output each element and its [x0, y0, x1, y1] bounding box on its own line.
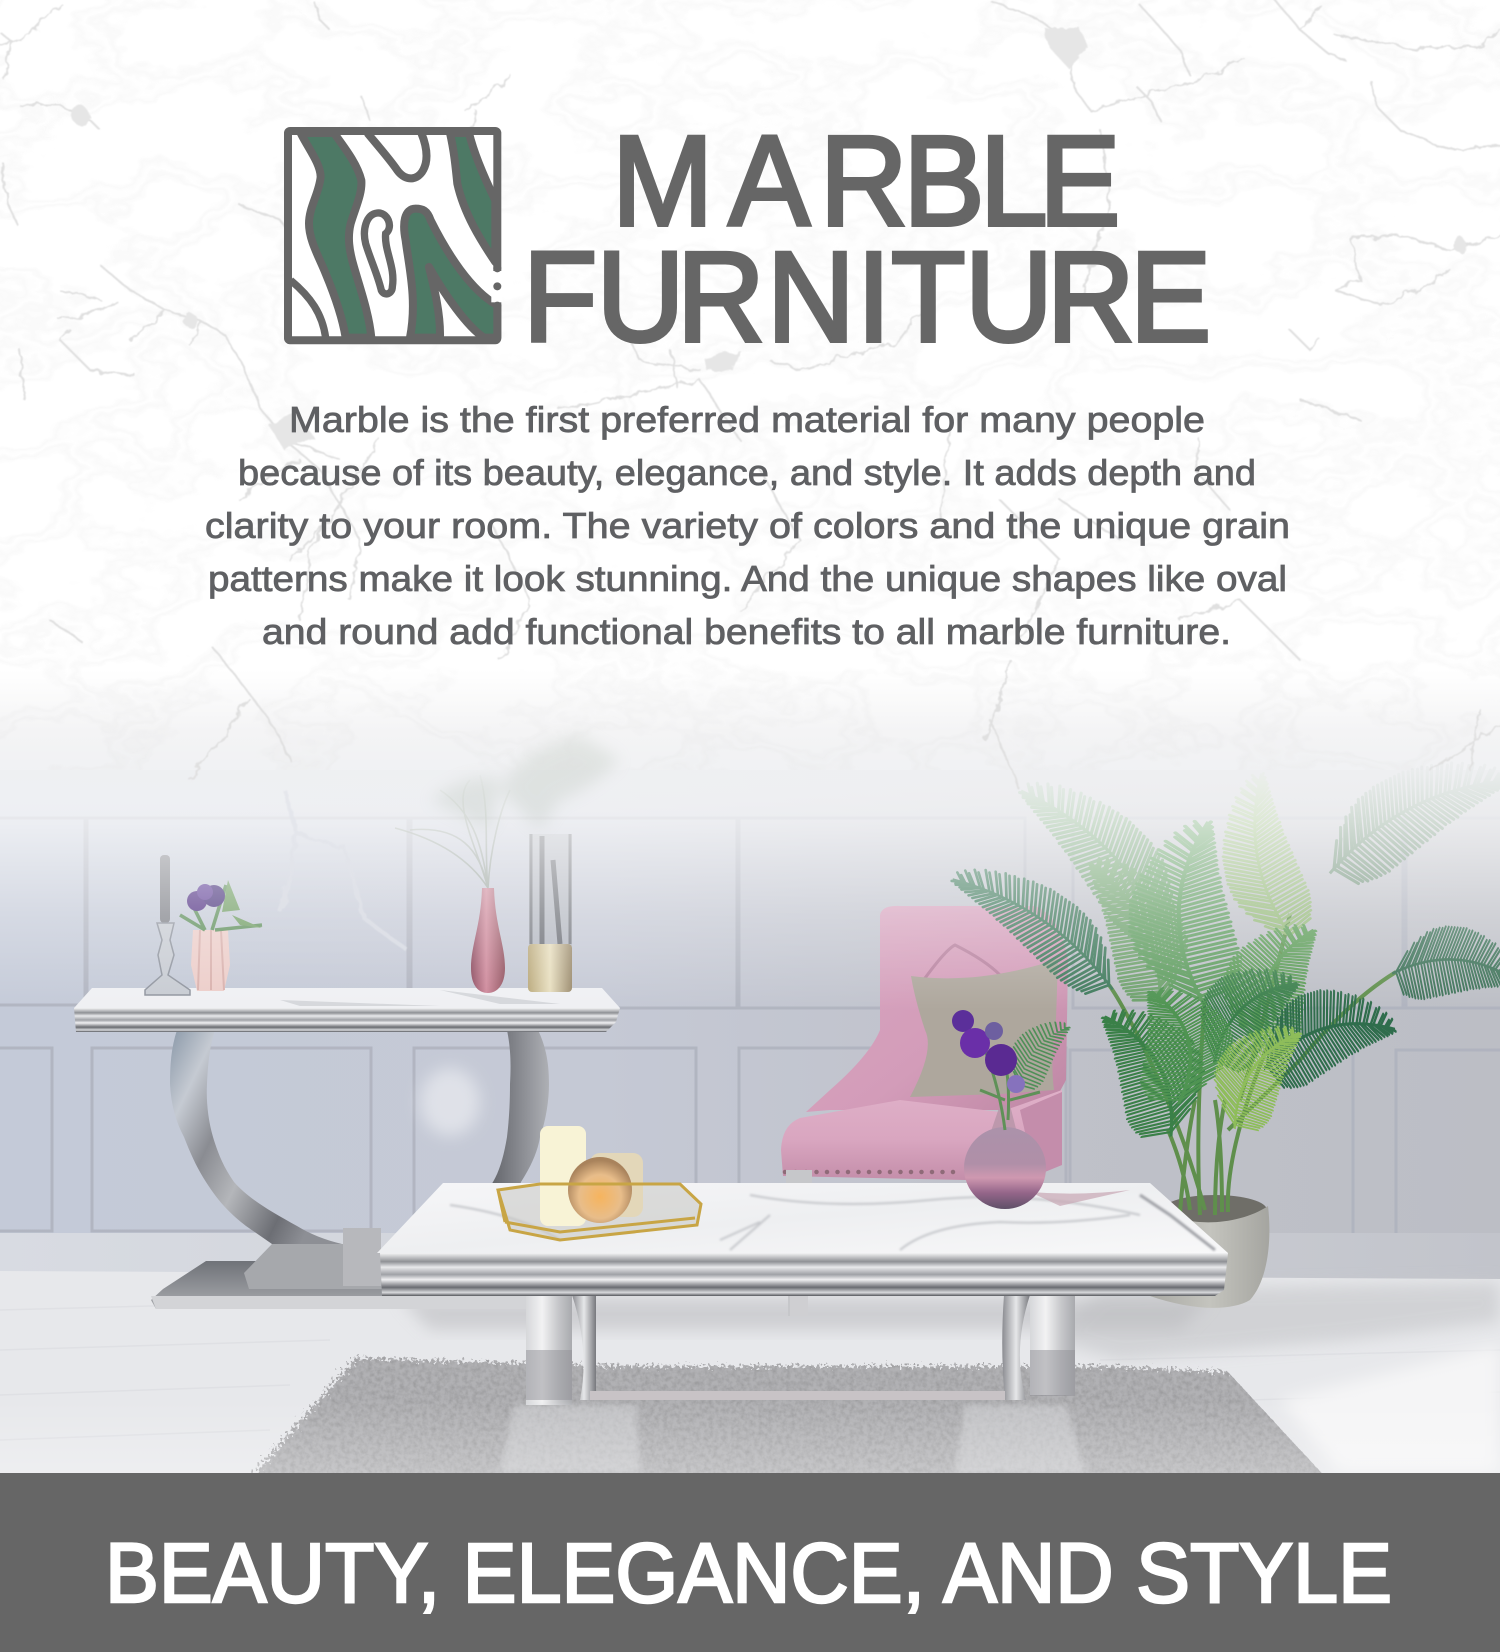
frond: right mid dark: [1247, 974, 1403, 1094]
console chrome edge: [74, 1008, 620, 1032]
title: Marble Furniture: [523, 110, 1211, 369]
chair seat: [781, 1090, 1062, 1180]
pale foliage above vases: [430, 735, 620, 830]
banner slogan: BEAUTY, ELEGANCE, AND STYLE: [105, 1526, 1392, 1620]
frond: centre: [1128, 819, 1245, 1006]
gold tray rim: [498, 1184, 701, 1240]
amber jar front: [568, 1157, 632, 1223]
wall panel mouldings: [0, 818, 1500, 1238]
chair legs: [786, 1170, 812, 1316]
pillar candle: [540, 1126, 586, 1226]
frond: upper left pale: [1002, 752, 1209, 959]
console table: [74, 988, 620, 1309]
wall veins: [282, 790, 407, 950]
chair arm: [1020, 1092, 1062, 1176]
skirting board: [0, 1233, 1500, 1280]
logo mark: [288, 131, 503, 340]
purple flowers: [952, 1010, 974, 1032]
console ring left: [170, 1030, 342, 1244]
logo teardrop: [364, 213, 393, 294]
right leg: [1030, 1295, 1075, 1395]
intro paragraph: clarity to your room. The variety of colors and the unique grain: [205, 505, 1290, 546]
rug: [246, 1358, 1330, 1482]
table legs: [500, 1293, 1085, 1473]
flower stems: [980, 1050, 1040, 1130]
console base block: [244, 1244, 383, 1289]
console ring right: [480, 1030, 549, 1200]
wall highlight: [420, 1068, 480, 1136]
logo frame break: [491, 271, 503, 302]
frond: top centre yellow-green: [1210, 769, 1316, 949]
logo lower-left curve: [291, 280, 326, 338]
logo right green band: [450, 133, 495, 262]
bottom banner: [0, 1473, 1500, 1652]
marble blotches: [71, 28, 1467, 448]
candle holder: [145, 855, 190, 995]
plant stems: [1109, 914, 1396, 1215]
floor planks: [0, 1302, 1500, 1440]
palm fronds: [940, 732, 1500, 1151]
amber jar back: [590, 1153, 643, 1217]
pink vase: [471, 888, 505, 993]
wall: [0, 770, 1500, 1280]
table marble top: [377, 1183, 1228, 1253]
marble veins: [0, 0, 1500, 790]
frond: far right dark: [1390, 922, 1500, 1007]
left leg: [526, 1295, 572, 1405]
marble cloud texture: [0, 0, 1500, 770]
lower glass reflections: [500, 1405, 1085, 1473]
glass cylinder vase: [528, 834, 572, 992]
console decor: [145, 775, 572, 995]
pink chair: [781, 906, 1068, 1316]
intro paragraph: because of its beauty, elegance, and style. It adds depth and: [238, 452, 1256, 493]
candle and tray: [498, 1126, 701, 1240]
floor shadow of plant: [1050, 1282, 1500, 1360]
logo top wiggle: [367, 133, 427, 178]
vase reflection on table: [1030, 1190, 1130, 1206]
logo frame dots: [493, 264, 501, 310]
chair back: [806, 906, 1068, 1112]
scene top fade: [0, 670, 1500, 1010]
title line 2: FURNITURE: [523, 226, 1211, 369]
cushion: [910, 959, 1058, 1097]
frond: left dark: [940, 841, 1140, 1007]
fern sprig: [997, 1007, 1080, 1095]
table veins: [450, 1195, 1215, 1250]
bottom fade: [0, 1400, 1500, 1473]
console marble top: [74, 988, 620, 1008]
intro paragraph: Marble is the first preferred material for many people: [289, 399, 1205, 440]
console foot: [151, 1261, 526, 1309]
floor: [0, 1271, 1500, 1473]
table chrome edge: [380, 1253, 1228, 1296]
frond: far left mid: [1066, 838, 1211, 1016]
frond: centre dark: [1175, 943, 1316, 1082]
logo frame: [288, 131, 497, 340]
chair nails: [785, 1170, 960, 1174]
intro paragraph: patterns make it look stunning. And the unique shapes like oval: [208, 558, 1287, 599]
title line 1: MARBLE: [612, 110, 1120, 253]
frond: right centre: [1204, 904, 1341, 1061]
floor light patch: [1280, 1345, 1500, 1473]
coffee table: [377, 1183, 1228, 1473]
intro paragraph: and round add functional benefits to all marble furniture.: [262, 611, 1231, 652]
interior scene photo: [0, 670, 1500, 1482]
frond: bright: [1193, 1004, 1320, 1142]
purple bud vase: [952, 1007, 1080, 1209]
logo centre green form: [404, 209, 497, 338]
frond: top right pale: [1304, 732, 1500, 896]
frond: lower left dark: [1077, 985, 1228, 1151]
plant pot: [1150, 1195, 1269, 1308]
intro paragraph: [205, 399, 1290, 652]
tray mirror: [498, 1184, 701, 1240]
frond: inner: [1120, 974, 1245, 1112]
dried flowers: [395, 775, 510, 888]
coffee table shadow: [400, 1298, 1210, 1330]
peach vase with purple flowers: [180, 880, 262, 991]
logo left green band: [301, 133, 371, 338]
